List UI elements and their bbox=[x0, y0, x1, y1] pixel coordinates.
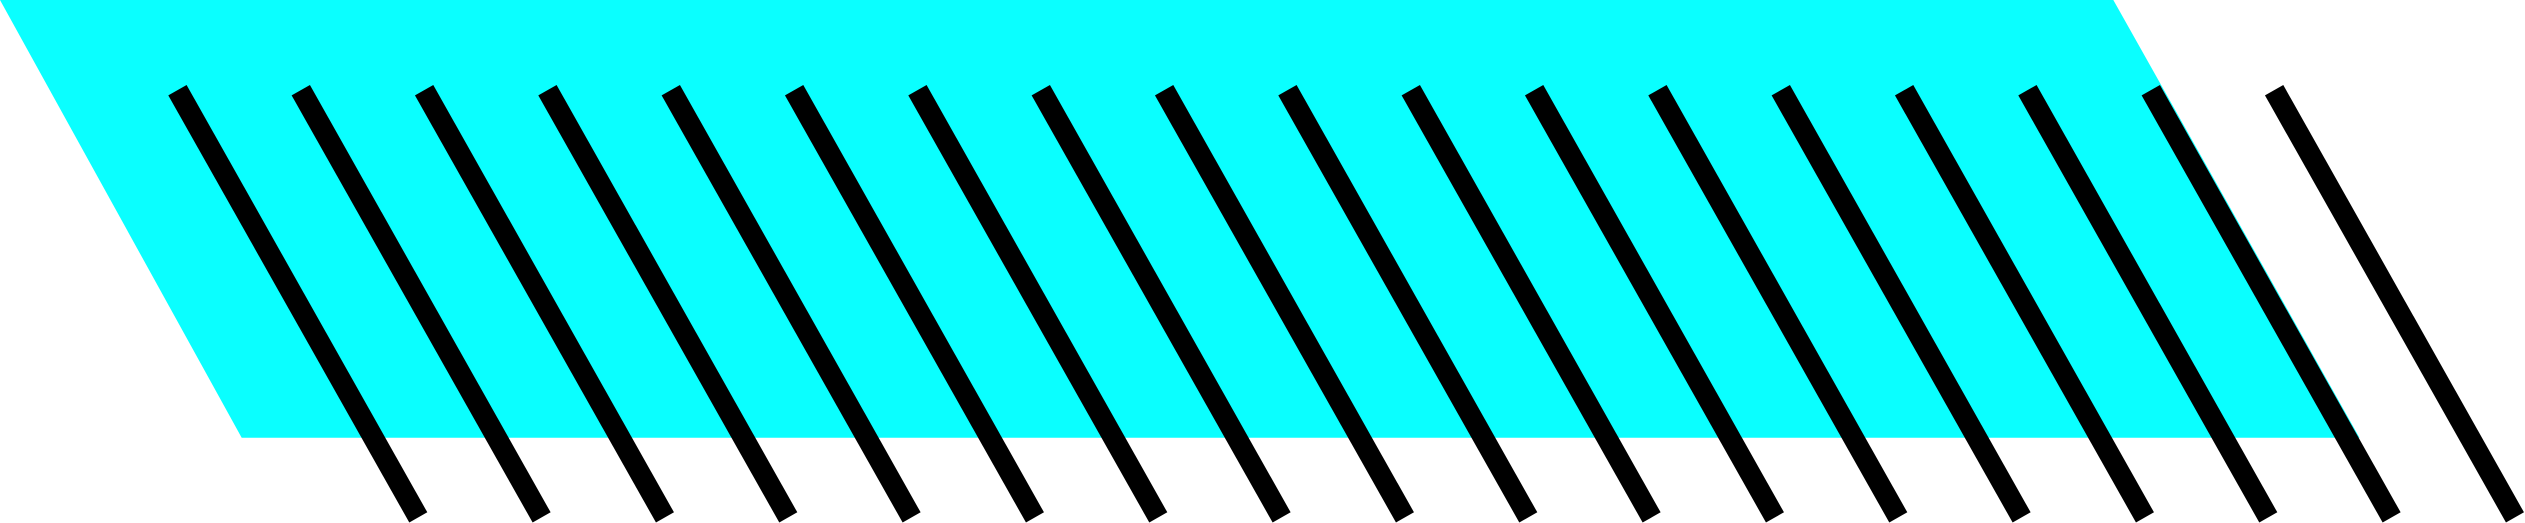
black diagonal bars bbox=[168, 85, 2524, 522]
cyan parallelogram bbox=[0, 0, 2360, 438]
